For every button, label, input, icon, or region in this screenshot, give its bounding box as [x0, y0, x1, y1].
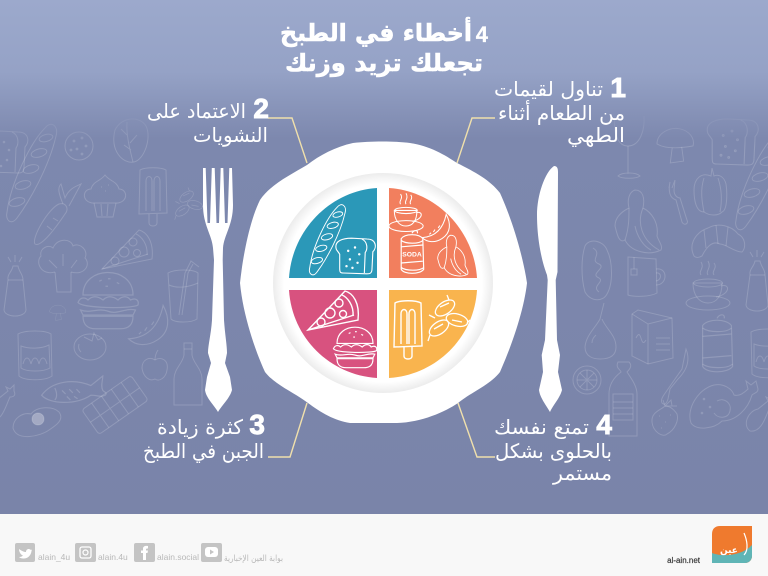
title: [280, 17, 489, 77]
icon: fork: [203, 168, 233, 412]
title: تجعلك تزيد وزنك: [285, 49, 483, 77]
mistake 4 text: مستمر: [552, 461, 612, 485]
mistake 2 text: 2: [253, 93, 269, 124]
quadrant: starches: [289, 188, 377, 278]
connector lines: [268, 118, 495, 457]
mistake 3 text: 3: [249, 409, 265, 440]
mistake 3 text: الجبن في الطبخ: [143, 439, 264, 464]
mistake 2 text: [147, 93, 269, 147]
social: youtube: بوابة العين الإخبارية: [224, 554, 283, 564]
icon: knife: [537, 166, 562, 412]
mistake 4 text: تمتع نفسك: [494, 415, 589, 439]
quadrant: snacks while cooking: [389, 188, 477, 278]
quadrant: sweets: [389, 290, 477, 378]
mistake 4 text: بالحلوى بشكل: [495, 439, 612, 463]
title: 4: [476, 22, 489, 47]
social: instagram: [75, 543, 128, 562]
mistake 1 text: [494, 72, 626, 148]
mistake 1 text: من الطعام أثناء: [498, 100, 625, 125]
mistake 1 text: 1: [610, 72, 626, 103]
logo: عين: [720, 546, 738, 556]
social: youtube: [201, 543, 283, 564]
mistake 4 text: 4: [596, 409, 612, 440]
quadrant: cheese: [289, 290, 377, 378]
social: facebook: [134, 543, 199, 562]
mistake 2 text: الاعتماد على: [147, 99, 246, 123]
plate: [240, 142, 527, 423]
plate inner rim: [273, 173, 493, 393]
social: facebook: alain.social: [157, 552, 199, 562]
title: أخطاء في الطبخ: [280, 17, 472, 47]
footer bar: [0, 514, 768, 576]
social: instagram: alain.4u: [98, 552, 128, 562]
mistake 3 text: [143, 409, 265, 464]
mistake 1 text: تناول لقيمات: [494, 77, 603, 101]
quadrant: snacks while cooking: SODA: [402, 252, 422, 259]
mistake 1 text: الطهي: [567, 123, 625, 148]
mistake 3 text: كثرة زيادة: [157, 415, 243, 439]
social: twitter: alain_4u: [38, 552, 70, 562]
mistake 4 text: [494, 409, 612, 485]
background food doodle pattern: [0, 116, 768, 437]
logo: [712, 526, 752, 563]
social: twitter: [15, 543, 70, 562]
logo text: al-ain.net: [667, 556, 701, 565]
mistake 2 text: النشويات: [193, 123, 268, 147]
